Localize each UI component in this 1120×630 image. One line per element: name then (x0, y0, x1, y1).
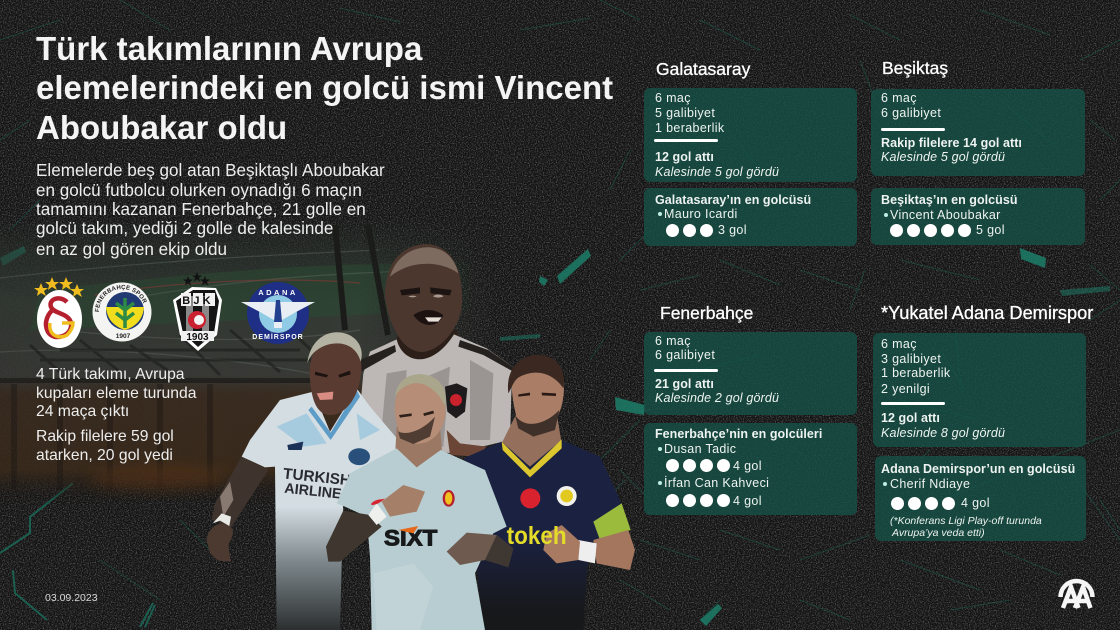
text: *Yukatel Adana Demirspor (881, 303, 1093, 323)
text: 4 Türk takımı, Avrupa (36, 366, 185, 383)
panel: Galatasaray top scorer (644, 188, 857, 246)
text: Elemelerde beş gol atan Beşiktaşlı Aboubakar (36, 161, 385, 180)
icon: Adana Demirspor crest (241, 282, 315, 344)
text: Mauro Icardi (664, 207, 738, 221)
side text: match and goal totals (36, 366, 196, 464)
icon: Fenerbahçe crest: 1907 (116, 333, 131, 340)
text: Beşiktaş’ın en golcüsü (881, 193, 1018, 207)
text: Dusan Tadic (664, 442, 736, 456)
text: 6 maç (881, 91, 917, 105)
text: 2 yenilgi (881, 382, 930, 396)
text: Aboubakar oldu (36, 109, 287, 146)
text: elemelerindeki en golcü ismi Vincent (36, 69, 613, 106)
text: 6 galibiyet (655, 348, 715, 362)
text: Galatasaray’ın en golcüsü (655, 193, 811, 207)
icon: Beşiktaş crest: 1903 (186, 332, 209, 343)
text: tamamını kazanan Fenerbahçe, 21 golle en (36, 200, 366, 219)
text: Kalesinde 8 gol gördü (881, 426, 1005, 440)
text: Cherif Ndiaye (890, 477, 970, 491)
player: Icardi in Galatasaray kit (326, 374, 513, 630)
text: Fenerbahçe’nin en golcüleri (655, 427, 822, 441)
text: 4 gol (961, 496, 990, 510)
team block: Yukatel Adana Demirspor (873, 303, 1094, 541)
panel: Adana Demirspor top scorer (875, 456, 1086, 541)
team block: Fenerbahçe (644, 303, 857, 515)
text: 4 gol (733, 494, 762, 508)
text: golcü takım, yediği 2 golle de kalesinde (36, 219, 333, 238)
icon: Fenerbahçe crest (92, 282, 152, 342)
panel: Galatasaray record (644, 88, 857, 182)
text: Rakip filelere 59 gol (36, 428, 174, 445)
panel: Beşiktaş top scorer (871, 188, 1085, 245)
text: Fenerbahçe (660, 303, 753, 323)
player: Ndiaye in Adana Demirspor kit: AIRLINES (284, 481, 352, 504)
team block: Galatasaray (644, 59, 857, 246)
text: kupaları eleme turunda (36, 385, 196, 402)
text: 4 gol (733, 459, 762, 473)
text: Kalesinde 5 gol gördü (655, 165, 779, 179)
player: Tadić in Fenerbahçe kit: tokeh (507, 522, 567, 550)
player: Aboubakar in Beşiktaş kit (357, 244, 515, 457)
icon: Beşiktaş crest: BJK (182, 295, 214, 307)
text: İrfan Can Kahveci (664, 476, 769, 490)
player: Icardi in Galatasaray kit: SIXT (384, 526, 438, 551)
icon: Fenerbahçe crest: FENERBAHÇE SPOR (94, 284, 147, 312)
text: Kalesinde 5 gol gördü (881, 150, 1005, 164)
text: Türk takımlarının Avrupa (36, 30, 422, 67)
player: Tadić in Fenerbahçe kit (463, 355, 635, 630)
text: 21 gol attı (655, 377, 714, 391)
date: 03.09.2023 (45, 592, 98, 604)
panel: Adana Demirspor record (873, 333, 1086, 447)
text: Galatasaray (656, 59, 750, 79)
text: 5 gol (976, 223, 1005, 237)
text: 6 maç (655, 334, 691, 348)
text: 1 beraberlik (655, 121, 725, 135)
text: Avrupa’ya veda etti) (892, 527, 985, 539)
lead paragraph (36, 161, 385, 259)
panel: Beşiktaş record (871, 89, 1085, 176)
text: en az gol gören ekip oldu (36, 240, 227, 259)
text: 12 gol attı (655, 150, 714, 164)
text: 5 galibiyet (655, 106, 715, 120)
text: 6 galibiyet (881, 106, 941, 120)
icon: Beşiktaş crest (173, 272, 222, 351)
title (36, 30, 613, 146)
text: Beşiktaş (882, 58, 948, 78)
text: en golcü futbolcu olurken oynadığı 6 maçın (36, 181, 362, 200)
icon: Adana Demirspor crest: DEMİRSPOR (252, 333, 304, 341)
text: Vincent Aboubakar (890, 208, 1001, 222)
icon: Adana Demirspor crest: ADANA (258, 288, 298, 297)
text: 6 maç (881, 337, 917, 351)
text: 1 beraberlik (881, 366, 951, 380)
panel: Fenerbahçe record (644, 332, 857, 415)
text: atarken, 20 gol yedi (36, 447, 173, 464)
stadium photo behind logos and players (0, 224, 474, 500)
text: 24 maça çıktı (36, 403, 129, 420)
text: Kalesinde 2 gol gördü (655, 391, 779, 405)
text: Adana Demirspor’un en golcüsü (881, 462, 1075, 476)
text: 6 maç (655, 91, 691, 105)
panel: Fenerbahçe top scorers (644, 423, 857, 515)
player: Ndiaye in Adana Demirspor kit: TURKISH (282, 465, 352, 489)
text: 12 gol attı (881, 411, 940, 425)
icon: Galatasaray crest (34, 277, 84, 348)
team block: Beşiktaş (871, 58, 1085, 245)
text: Rakip filelere 14 gol attı (881, 136, 1022, 150)
text: 3 gol (718, 223, 747, 237)
player: Ndiaye in Adana Demirspor kit (207, 332, 398, 630)
text: (*Konferans Ligi Play-off turunda (890, 515, 1042, 527)
text: 3 galibiyet (881, 352, 941, 366)
